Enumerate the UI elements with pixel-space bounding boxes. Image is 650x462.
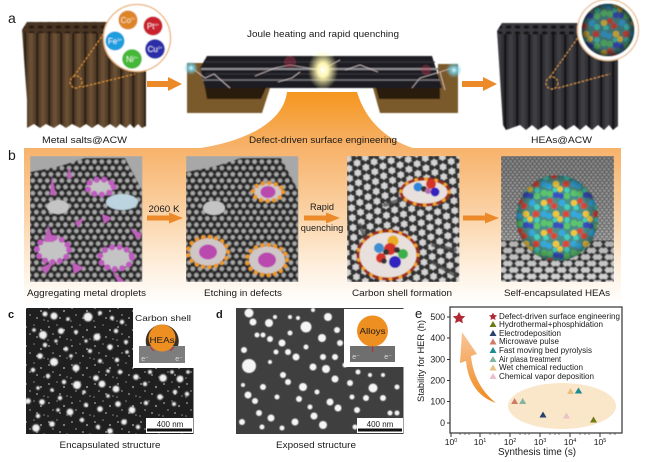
x axis tick labels: 10 — [594, 437, 603, 447]
y axis tick labels: 100 — [430, 396, 445, 406]
arrow: b step 1 — [147, 212, 183, 224]
ion Pt: Pt — [147, 22, 154, 31]
heading: defect-driven surface engineering: Defect-driven surface engineering — [249, 135, 397, 146]
curved trend arrow — [460, 332, 496, 403]
ion Ni: Ni — [126, 55, 134, 64]
ion Fe — [106, 32, 124, 50]
x axis tick labels: 10 — [474, 437, 483, 447]
x axis tick labels: 4 — [573, 438, 576, 444]
x axis tick labels: 10 — [445, 437, 454, 447]
glow spots — [184, 56, 462, 78]
pink streaks — [40, 166, 142, 282]
x axis title: Synthesis time (s) — [498, 447, 576, 458]
ion Pt: 4+ — [154, 22, 160, 27]
y axis title: Stability for HER (h) — [416, 320, 426, 402]
image 2: etching in defects — [186, 156, 298, 282]
label: rapid quenching: quenching — [301, 223, 343, 233]
left brown support — [187, 63, 270, 113]
y axis tick labels: 200 — [430, 376, 445, 386]
image 1: aggregating droplets — [30, 156, 142, 282]
panel letter d: d — [216, 309, 223, 321]
arrow: b step 2 — [304, 212, 340, 224]
orange funnel and panel b background — [24, 92, 621, 305]
label: etching: Etching in defects — [204, 288, 282, 298]
dashed zoom circle and leader lines — [70, 32, 135, 88]
legend: Fast moving bed pyrolysis — [499, 346, 592, 355]
label: 2060 K: 2060 K — [148, 204, 180, 215]
orange shell atoms — [358, 179, 449, 279]
inset label: e- left: e⁻ — [352, 354, 360, 361]
wood block — [22, 22, 146, 128]
label: exposed structure: Exposed structure — [276, 440, 356, 450]
inset: alloy schematic — [344, 309, 404, 367]
arrow: b step 3 — [463, 212, 499, 224]
label: aggregating: Aggregating metal droplets — [27, 288, 146, 298]
heading: Joule heating: Joule heating and rapid quenching — [247, 29, 399, 40]
defect holes with carbon shell — [358, 179, 449, 279]
image 4: self-encapsulated HEAs — [501, 156, 614, 282]
orange ring atoms — [188, 183, 287, 275]
label: encapsulated structure: Encapsulated structure — [60, 440, 161, 450]
ion Cu: 2+ — [158, 45, 163, 50]
sparks — [192, 60, 452, 90]
x axis tick labels: 10 — [504, 437, 513, 447]
label: self-encapsulated: Self-encapsulated HEAs — [504, 288, 610, 298]
x axis tick labels: 3 — [543, 438, 546, 444]
legend: Hydrothermal+phosphidation — [499, 320, 603, 329]
right brown support — [373, 64, 458, 113]
y axis tick labels — [430, 312, 445, 428]
ion Fe: Fe — [108, 37, 117, 46]
panel letter c: c — [8, 309, 14, 321]
dark trench left — [205, 88, 266, 99]
x axis tick labels — [445, 437, 606, 447]
ion Co — [118, 10, 138, 30]
TEM image d — [236, 308, 404, 434]
y axis tick labels: 0 — [440, 418, 445, 428]
x axis tick labels: 1 — [483, 438, 486, 444]
bright particles — [239, 308, 400, 430]
inset label: e- right: e⁻ — [384, 354, 392, 361]
bright particles — [25, 311, 190, 434]
legend: Microwave pulse — [499, 337, 559, 346]
label: Metal salts@ACW: Metal salts@ACW — [42, 135, 128, 146]
black carbon ribbon — [200, 56, 442, 88]
dashed zoom circle and leader lines — [546, 32, 610, 89]
plot frame and ticks — [447, 307, 622, 437]
defect holes — [190, 183, 285, 274]
label: carbon shell: Carbon shell formation — [352, 288, 452, 298]
legend: Chemical vapor deposition — [499, 372, 594, 381]
arrow: a step 1 — [147, 77, 182, 91]
ion Cu — [145, 39, 165, 59]
panel a: metal salts on ACW — [22, 4, 170, 128]
x axis tick labels: 10 — [534, 437, 543, 447]
central hot spot — [308, 50, 338, 90]
pink clusters — [199, 186, 276, 268]
ion Fe: 3+ — [117, 37, 123, 42]
y axis tick labels: 400 — [430, 333, 445, 343]
inset label: Alloys: Alloys — [360, 326, 386, 336]
HEA nanoparticle magnifier — [578, 0, 638, 60]
label: rapid quenching: Rapid — [310, 202, 334, 212]
panel letter a: a — [8, 10, 16, 26]
label: HEAs@ACW: HEAs@ACW — [531, 135, 593, 146]
charcoal block — [497, 23, 618, 130]
inset: carbon shell schematic — [133, 308, 194, 368]
y axis tick labels: 500 — [430, 312, 445, 322]
dark folded streaks — [360, 195, 455, 275]
Joule heating device — [184, 50, 462, 113]
pink metal droplets — [37, 180, 132, 269]
scale bar c — [146, 418, 193, 433]
inset label: HEAs: HEAs — [150, 335, 174, 345]
HEA sphere — [516, 175, 598, 261]
metal atoms in top defect — [414, 179, 440, 196]
scatter chart: stability vs synthesis time — [416, 307, 622, 458]
legend — [489, 312, 620, 381]
panel letter b: b — [8, 147, 16, 163]
x axis tick labels: 10 — [564, 437, 573, 447]
ion Co: Co — [121, 16, 131, 25]
ion Ni — [122, 49, 142, 69]
legend: Air plasa treatment — [499, 355, 562, 364]
ion Ni: 2+ — [134, 55, 139, 60]
x axis tick labels: 0 — [454, 438, 457, 444]
inset label: Carbon shell: Carbon shell — [135, 313, 191, 323]
metal atoms in bottom defect — [374, 236, 408, 268]
legend: Defect-driven surface engineering — [499, 312, 620, 321]
scale bar d — [357, 418, 403, 433]
scale bar c: 400 nm — [157, 420, 184, 429]
image 3: carbon shell formation — [347, 156, 460, 282]
ion Cu: Cu — [148, 45, 158, 54]
x axis tick labels: 2 — [513, 438, 516, 444]
data markers — [453, 312, 597, 422]
inset label: e- left: e⁻ — [141, 356, 149, 363]
orange ellipse highlight — [508, 383, 616, 429]
ion magnifier circle — [104, 4, 170, 72]
inset label: e- right: e⁻ — [175, 356, 183, 363]
legend: Electrodeposition — [499, 329, 561, 338]
scale bar d: 400 nm — [367, 420, 394, 429]
y axis tick labels: 300 — [430, 354, 445, 364]
TEM image c — [25, 308, 194, 434]
legend: Wet chemical reduction — [499, 363, 583, 372]
defect holes — [38, 180, 138, 269]
ion Co: 2+ — [131, 16, 136, 21]
x axis tick labels: 5 — [603, 438, 606, 444]
panel a: HEAs on ACW — [497, 0, 638, 130]
dark trench right — [376, 88, 440, 99]
arrow: a step 2 — [462, 77, 497, 91]
panel letter e: e — [415, 306, 422, 321]
ion Pt — [144, 16, 162, 36]
